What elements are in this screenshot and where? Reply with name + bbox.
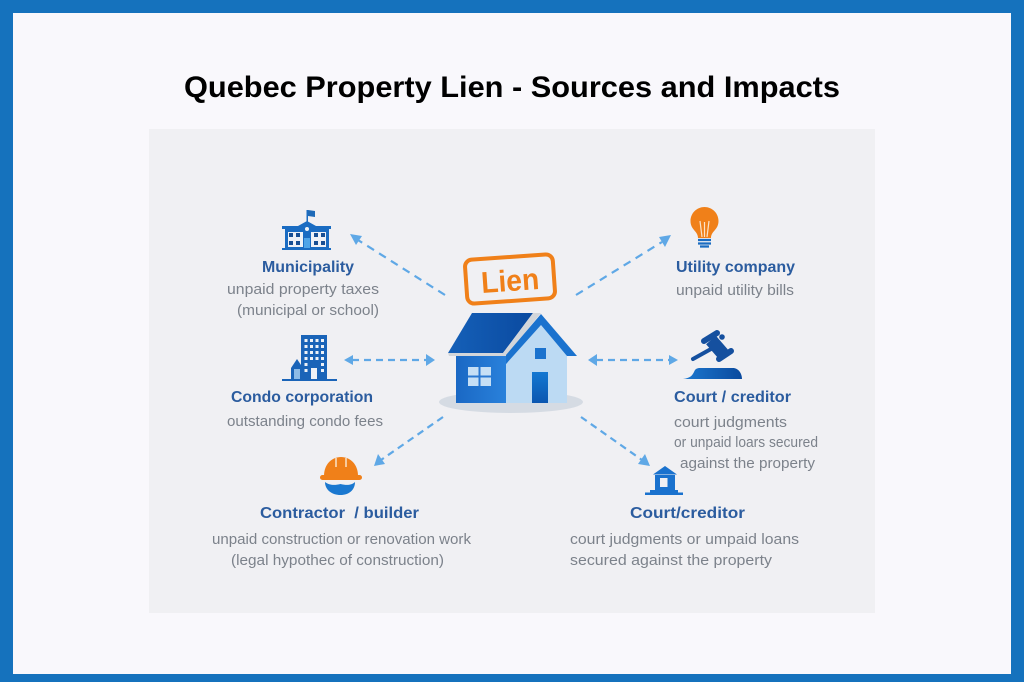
- icon: bank: [645, 466, 683, 495]
- arrow: to lower court creditor: [581, 417, 650, 466]
- text: court detail 1: court judgments: [674, 414, 787, 431]
- text: court detail 3: against the property: [680, 455, 815, 472]
- arrow: to contractor: [374, 417, 443, 466]
- icon: gavel: [683, 333, 742, 379]
- lien badge: [465, 254, 555, 304]
- text: utility detail: unpaid utility bills: [676, 282, 794, 299]
- arrow: court creditor double: [588, 354, 678, 366]
- arrow: condo corporation double: [344, 354, 435, 366]
- text: lower court detail 1: court judgments or umpaid loans: [570, 531, 799, 548]
- text: municipality detail 2: (municipal or school): [237, 302, 379, 319]
- icon: municipality building: [282, 210, 331, 250]
- heading: municipality: Municipality: [262, 259, 354, 276]
- icon: light bulb: [690, 207, 718, 246]
- text: contractor detail 2: (legal hypothec of construction): [231, 552, 444, 569]
- text: lower court detail 2: secured against the property: [570, 552, 773, 569]
- text: condo detail: outstanding condo fees: [227, 413, 383, 430]
- heading: court creditor lower: Court/creditor: [630, 505, 745, 522]
- arrow: to utility company: [576, 235, 671, 295]
- text: municipality detail 1: unpaid property taxes: [227, 281, 379, 298]
- icon: hard hat: [320, 457, 362, 495]
- panel: diagram background: [149, 129, 875, 613]
- text: contractor detail 1: unpaid construction or renovation work: [212, 531, 471, 548]
- icon: house: [439, 313, 583, 413]
- text: court detail 2: or unpaid loars secured: [674, 434, 818, 451]
- heading: condo corporation: Condo corporation: [231, 389, 373, 406]
- lien badge: Lien: [480, 263, 540, 300]
- icon: condo building: [282, 335, 337, 381]
- heading: utility company: Utility company: [676, 259, 795, 276]
- heading: court creditor right: Court / creditor: [674, 389, 791, 406]
- arrow: to municipality: [350, 234, 445, 295]
- heading: contractor: Contractor / builder: [260, 505, 419, 522]
- title: Quebec Property Lien - Sources and Impacts: [184, 71, 840, 104]
